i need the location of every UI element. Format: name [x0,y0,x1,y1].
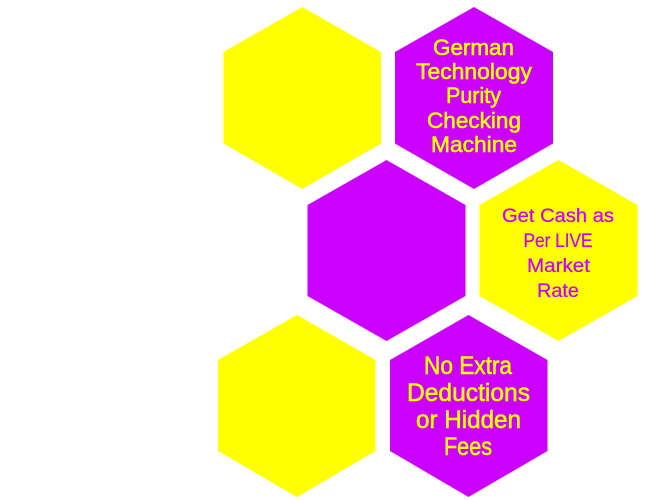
label: No Extra Deductions or Hidden Fees: or Hidden [416,406,521,434]
label: No Extra Deductions or Hidden Fees: No Extra [424,352,512,380]
hexagon: yellow top left [224,7,381,189]
hexagon: yellow live market rate [480,160,638,341]
label: German Technology Purity Checking Machine: Machine [431,132,517,157]
label: Get Cash as Per LIVE Market Rate: Rate [537,280,579,302]
label: No Extra Deductions or Hidden Fees: Fees [444,433,492,461]
label: Get Cash as Per LIVE Market Rate: Get Cash as [502,205,614,227]
label: German Technology Purity Checking Machine: German [433,35,514,60]
label: German Technology Purity Checking Machine: Technology [416,59,532,84]
label: Get Cash as Per LIVE Market Rate [502,205,614,302]
label: Get Cash as Per LIVE Market Rate: Per LIVE [524,230,592,252]
label: No Extra Deductions or Hidden Fees: Deductions [407,379,530,407]
label: No Extra Deductions or Hidden Fees [407,352,530,461]
hexagon: purple German technology [395,7,553,189]
hexagon: purple no extra deductions [390,315,548,497]
hexagon: purple centre [308,160,466,341]
label: German Technology Purity Checking Machine [416,35,532,157]
hexagon: yellow bottom left [218,315,376,497]
label: German Technology Purity Checking Machine: Checking [427,108,521,133]
label: German Technology Purity Checking Machine: Purity [446,83,501,108]
label: Get Cash as Per LIVE Market Rate: Market [527,255,591,277]
